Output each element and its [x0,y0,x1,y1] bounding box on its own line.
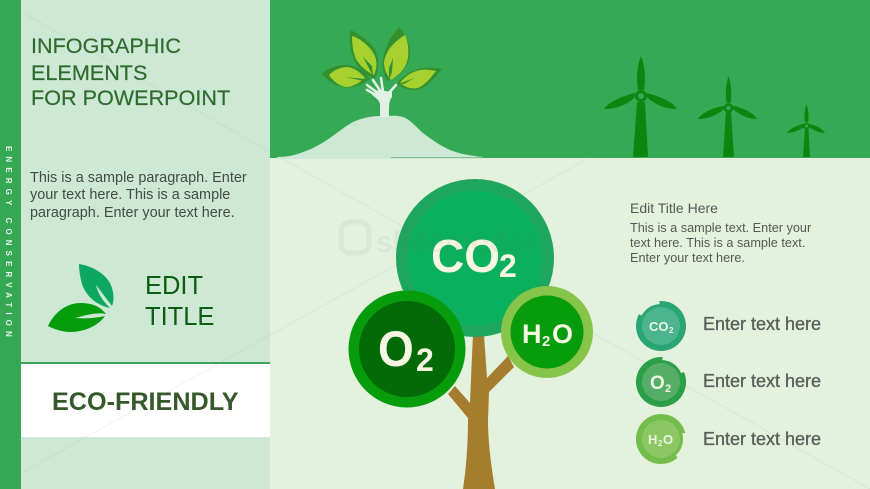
edit title heading: TITLE [145,303,214,331]
bubble: H2O [501,286,593,378]
legend item: O2: Enter text here [703,371,821,391]
baseline accent [391,157,483,158]
legend item: H2O: H [648,432,657,447]
wind turbine: large [604,56,677,157]
legend item: O2 [631,352,821,412]
legend item: O2: O [650,373,665,394]
legend item: CO2: Enter text here [703,314,821,334]
panel: top green banner [270,0,870,158]
left paragraph: This is a sample paragraph. Enter [30,170,247,186]
bubble: H2O: H [522,319,542,349]
legend item: CO2: CO [649,319,668,334]
bubble: O2 [348,290,466,408]
right text block: Enter your text here. [630,251,745,265]
legend item: H2O: O [663,432,673,447]
wind turbine: medium [698,76,757,157]
legend item: H2O [629,407,821,471]
edit title heading: EDIT [145,272,203,300]
right text block [630,200,812,265]
title: INFOGRAPHIC [31,33,181,58]
left paragraph: paragraph. Enter your text here. [30,205,235,221]
wind turbine: small [787,104,825,157]
right text block: text here. This is a sample text. [630,236,805,250]
vertical label: energy conservation: ENERGY CONSERVATION [4,146,13,342]
legend item: CO2 [637,302,821,350]
illustration: hand and leaves on a hill [277,27,483,159]
hill [277,116,483,159]
bubble: CO2 [396,179,554,337]
bubble: O2: O [378,322,414,377]
left paragraph [30,170,247,221]
leaf: left [322,65,370,88]
bubble: H2O: 2 [542,333,550,350]
leaf: right [397,68,442,90]
right text block: Edit Title Here [630,200,718,216]
eco-friendly band: ECO-FRIENDLY [52,388,239,416]
leaf: top right [383,27,410,81]
title [31,33,230,110]
edit title heading [145,272,214,331]
legend item: H2O: 2 [658,439,663,448]
bubble: O2: 2 [416,342,434,378]
right text block: This is a sample text. Enter your [630,221,812,235]
watermark: slidemodel [376,226,533,259]
tree with gas bubbles [348,179,593,489]
title: FOR POWERPOINT [31,85,230,110]
bubble: CO2: 2 [499,248,517,284]
leaf: top left [350,30,378,78]
tree trunk and branches [448,335,514,489]
legend item: H2O: Enter text here [703,429,821,449]
bubble: CO2: CO [431,230,500,282]
legend item: O2: 2 [665,383,671,395]
title: ELEMENTS [31,60,147,85]
legend item: CO2: 2 [669,326,674,335]
hand [367,78,396,117]
eco-friendly band [21,362,270,437]
icon: two leaves [48,264,114,332]
panel: left column [0,0,270,489]
bubble: H2O: O [552,319,573,349]
left paragraph: your text here. This is a sample [30,187,230,203]
